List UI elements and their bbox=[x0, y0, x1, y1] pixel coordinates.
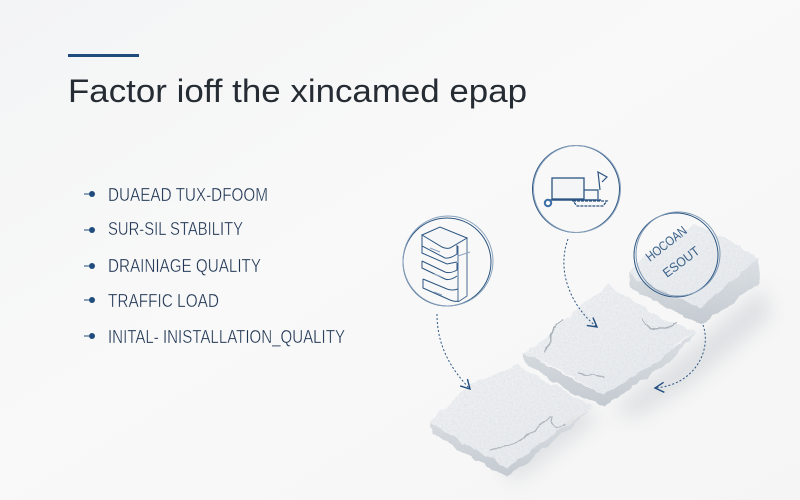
title: Factor ioff the xincamed epap bbox=[68, 73, 527, 109]
slab 3 side faces bbox=[628, 258, 759, 325]
list item: traffic load: TRAFFIC LOAD bbox=[108, 291, 219, 311]
icon: cart on conveyor in circle bbox=[532, 146, 620, 232]
circle label: HOCOAN bbox=[643, 223, 690, 264]
circle label: ESOUT bbox=[660, 243, 702, 280]
slab 3 (right) bbox=[628, 224, 759, 325]
list item: sub-soil stability: SUR-SIL STABILITY bbox=[108, 219, 243, 239]
slab 1 side faces bbox=[430, 407, 592, 478]
icon: stacked layers in circle bbox=[403, 216, 493, 306]
slab 2 side faces bbox=[523, 332, 697, 406]
accent rule bbox=[68, 54, 139, 57]
slab 1 top bbox=[430, 365, 592, 468]
list item: drainage quality: DRAINIAGE QUALITY bbox=[108, 256, 261, 276]
list item: initial installation quality: INITAL- INISTALLATION_QUALITY bbox=[108, 327, 345, 348]
icon: label circle on slab 3 bbox=[634, 212, 720, 297]
slab 1 cracks bbox=[490, 416, 565, 450]
arrow: slab 3 to slab 2 bbox=[655, 325, 705, 388]
slab 2 top bbox=[523, 285, 697, 395]
slab 2 cracks bbox=[545, 318, 677, 377]
slab shadows bbox=[500, 288, 772, 482]
arrow: cart to slab 2 bbox=[564, 239, 597, 327]
list item: dual load: DUAEAD TUX-DFOOM bbox=[108, 185, 268, 205]
slab 1 (left) bbox=[430, 365, 592, 478]
slab 2 (middle) bbox=[523, 285, 697, 406]
slab 3 top bbox=[628, 224, 758, 308]
factor list bbox=[84, 185, 345, 348]
arrow: layers to slab 1 bbox=[437, 314, 470, 389]
